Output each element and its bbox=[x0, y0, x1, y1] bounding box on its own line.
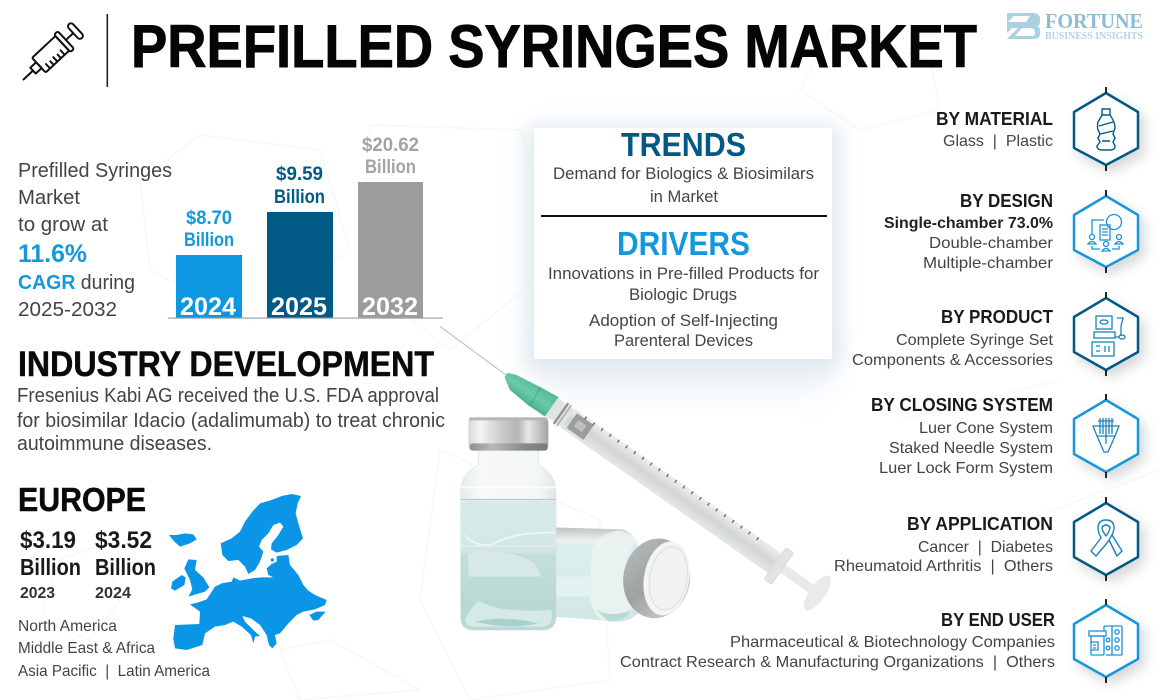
panel: industry development: autoimmune diseases. bbox=[17, 433, 212, 455]
bar 2025: 2025 bbox=[271, 293, 327, 321]
product labels: BY PRODUCT bbox=[941, 307, 1053, 327]
trends: in Market bbox=[650, 187, 718, 206]
bar 2024 bbox=[176, 208, 242, 321]
illustration: vials and syringe bbox=[440, 326, 836, 630]
trends: TRENDS bbox=[621, 126, 746, 163]
trends: Demand for Biologics & Biosimilars bbox=[553, 164, 814, 183]
bar 2024: $8.70 bbox=[186, 208, 232, 229]
icon: medicine bottle and blister in hexagon bbox=[1074, 599, 1138, 683]
bar 2032: $20.62 bbox=[362, 135, 419, 156]
lying vial bbox=[553, 527, 696, 624]
bar 2032 bbox=[358, 135, 423, 321]
design labels: BY DESIGN bbox=[960, 191, 1053, 211]
icon: clinical team in hexagon bbox=[1074, 190, 1138, 273]
icon: bottle in hexagon bbox=[1074, 87, 1138, 171]
Europe 2024 value bbox=[95, 527, 156, 602]
panel: trends and drivers bbox=[534, 126, 832, 359]
standing vial bbox=[461, 417, 556, 630]
title: PREFILLED SYRINGES MARKET bbox=[131, 13, 977, 80]
Europe 2024 value: $3.52 bbox=[95, 527, 152, 554]
logo: Fortune Business Insights bbox=[1007, 9, 1143, 42]
material labels bbox=[936, 109, 1053, 150]
growth statement bbox=[18, 160, 172, 321]
bar 2025: $9.59 bbox=[276, 164, 323, 185]
application labels: BY APPLICATION bbox=[907, 514, 1053, 534]
segment: by closing system bbox=[871, 394, 1138, 478]
material labels: Glass | Plastic bbox=[943, 133, 1053, 150]
panel shadow glow bbox=[526, 126, 840, 422]
other regions list bbox=[18, 618, 210, 680]
Europe 2024 value: Billion bbox=[95, 554, 156, 580]
bar 2024: Billion bbox=[184, 230, 234, 251]
segment: by end user bbox=[620, 599, 1138, 683]
segment: by product bbox=[852, 292, 1138, 376]
product labels bbox=[852, 307, 1054, 369]
logo: Fortune Business Insights: BUSINESS INSIGHTS bbox=[1045, 31, 1143, 42]
other regions list: Middle East & Africa bbox=[18, 640, 155, 657]
bar 2025 bbox=[267, 164, 333, 321]
closing system labels: Luer Lock Form System bbox=[879, 460, 1053, 477]
bar 2032: Billion bbox=[365, 157, 416, 178]
growth statement: Prefilled Syringes bbox=[18, 160, 172, 182]
design labels: Double-chamber bbox=[929, 235, 1054, 252]
drivers: Innovations in Pre-filled Products for bbox=[548, 264, 819, 283]
design labels: Single-chamber 73.0% bbox=[884, 215, 1053, 232]
end user labels: BY END USER bbox=[941, 610, 1055, 630]
icon: syringe bbox=[15, 20, 86, 88]
logo: Fortune Business Insights: FORTUNE bbox=[1045, 9, 1143, 33]
panel: industry development: for biosimilar Idacio (adalimumab) to treat chronic bbox=[17, 410, 445, 432]
Europe 2024 value: 2024 bbox=[95, 585, 131, 602]
header divider bbox=[106, 14, 108, 87]
icon: medical device in hexagon bbox=[1074, 292, 1138, 376]
closing system labels bbox=[871, 395, 1053, 477]
bar chart: market size bbox=[168, 135, 443, 321]
map: Europe bbox=[169, 494, 327, 650]
trends bbox=[553, 126, 814, 206]
other regions list: North America bbox=[18, 618, 117, 635]
syringe bbox=[494, 358, 836, 614]
Europe 2023 value: Billion bbox=[20, 554, 81, 580]
drivers: DRIVERS bbox=[617, 225, 750, 262]
icon: ribbon in hexagon bbox=[1074, 497, 1138, 581]
drivers: Adoption of Self-Injecting bbox=[589, 311, 778, 330]
panel: industry development: INDUSTRY DEVELOPMENT bbox=[18, 345, 434, 384]
closing system labels: BY CLOSING SYSTEM bbox=[871, 395, 1053, 415]
panel: Europe: EUROPE bbox=[18, 481, 146, 518]
panel: Europe bbox=[18, 481, 327, 680]
growth statement: Market bbox=[18, 187, 80, 209]
other regions list: Asia Pacific | Latin America bbox=[18, 663, 210, 680]
design labels bbox=[884, 191, 1054, 272]
end user labels: Contract Research & Manufacturing Organizations | Others bbox=[620, 654, 1055, 671]
growth statement: 2025-2032 bbox=[18, 299, 117, 321]
bar 2024: 2024 bbox=[180, 293, 236, 321]
material labels: BY MATERIAL bbox=[936, 109, 1053, 129]
icon: luer cone in hexagon bbox=[1074, 394, 1138, 478]
product labels: Components & Accessories bbox=[852, 352, 1053, 369]
drivers bbox=[548, 225, 819, 350]
end user labels bbox=[620, 610, 1055, 671]
panel: industry development bbox=[17, 345, 445, 455]
application labels: Cancer | Diabetes bbox=[918, 539, 1053, 556]
application labels bbox=[834, 514, 1053, 575]
growth statement: CAGR during bbox=[18, 272, 135, 294]
end user labels: Pharmaceutical & Biotechnology Companies bbox=[730, 634, 1055, 651]
closing system labels: Luer Cone System bbox=[919, 420, 1053, 437]
segment: by application bbox=[834, 497, 1138, 581]
growth statement: 11.6% bbox=[18, 240, 87, 268]
Europe 2023 value: 2023 bbox=[20, 585, 55, 602]
needle bbox=[440, 326, 506, 375]
design labels: Multiple-chamber bbox=[923, 255, 1054, 272]
segment: by design bbox=[884, 190, 1138, 273]
Europe 2023 value: $3.19 bbox=[20, 527, 76, 554]
application labels: Rheumatoid Arthritis | Others bbox=[834, 558, 1053, 575]
bar 2032: 2032 bbox=[362, 293, 418, 321]
growth statement: to grow at bbox=[18, 214, 108, 236]
bar 2025: Billion bbox=[274, 187, 325, 208]
closing system labels: Staked Needle System bbox=[889, 440, 1053, 457]
Europe 2023 value bbox=[20, 527, 81, 602]
panel: industry development: Fresenius Kabi AG received the U.S. FDA approval bbox=[17, 385, 439, 407]
product labels: Complete Syringe Set bbox=[896, 332, 1054, 349]
drivers: Biologic Drugs bbox=[629, 285, 737, 304]
segment: by material bbox=[936, 87, 1138, 171]
drivers: Parenteral Devices bbox=[614, 331, 753, 350]
